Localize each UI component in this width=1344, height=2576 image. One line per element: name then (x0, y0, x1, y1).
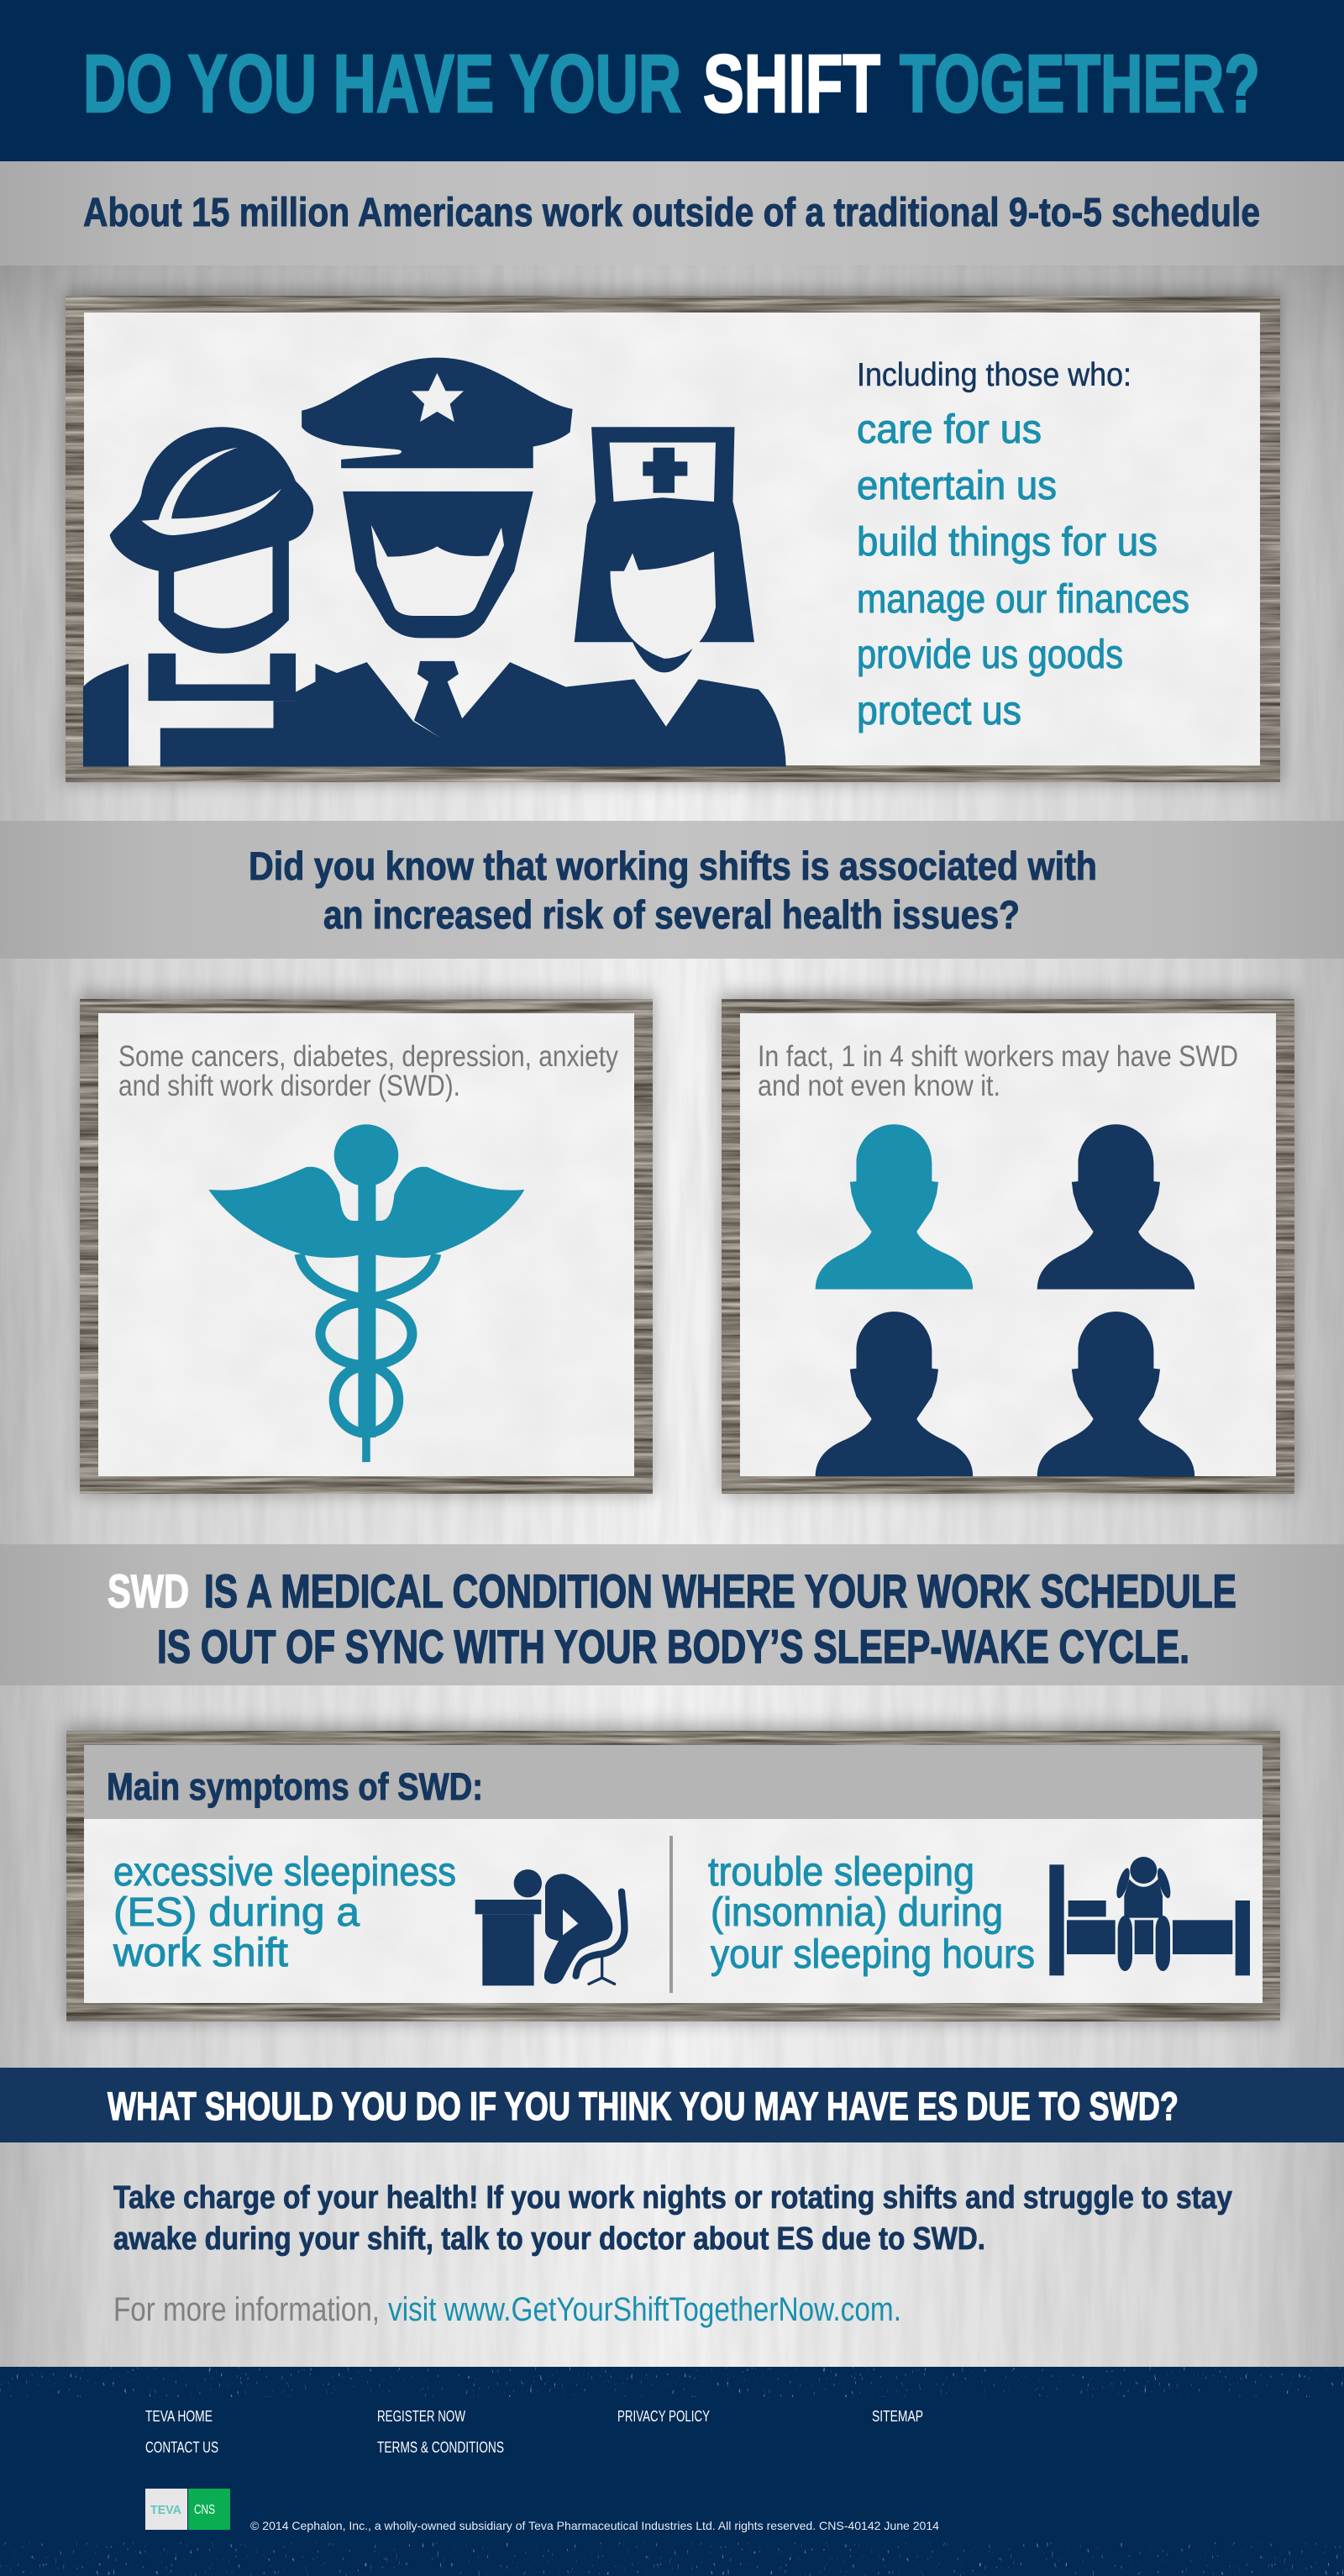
footer links: PRIVACY POLICY (617, 2408, 710, 2425)
text: 1 in 4 (758, 1040, 1238, 1102)
text: excessive sleepiness: excessive sleepiness (113, 1850, 456, 1895)
list: including those who: entertain us (857, 464, 1057, 508)
footer (0, 2367, 1344, 2576)
list: including those who: build things for us (857, 520, 1158, 565)
text: more information link: visit www.GetYourShiftTogetherNow.com. (388, 2291, 901, 2328)
band heading: Did you know that working shifts is associated with (249, 844, 1097, 888)
icon: construction worker (83, 427, 313, 766)
icon: person asleep at desk (475, 1869, 624, 1985)
list: including those who: protect us (857, 689, 1021, 733)
band heading (108, 1564, 1236, 1673)
text: conditions: Some cancers, diabetes, depression, anxiety (118, 1040, 618, 1073)
text: trouble sleeping: trouble sleeping (708, 1850, 974, 1895)
footer links: REGISTER NOW (377, 2408, 465, 2425)
footer links: TEVA HOME (145, 2408, 213, 2425)
panel: 1 in 4 shift workers (722, 994, 1294, 1494)
text: take charge of your health (113, 2180, 1232, 2257)
band: 15 million Americans (0, 161, 1344, 265)
panel: health conditions (80, 994, 653, 1494)
icon: four people, one highlighted (816, 1124, 1194, 1476)
text: conditions: and shift work disorder (SWD). (118, 1070, 460, 1102)
band: health issues question (0, 821, 1344, 959)
text: 1 in 4: In fact, 1 in 4 shift workers may have SWD (758, 1040, 1238, 1073)
text: trouble sleeping: your sleeping hours (711, 1932, 1035, 1977)
text: 1 in 4: and not even know it. (758, 1070, 1000, 1102)
list: including those who (857, 357, 1189, 733)
title (83, 38, 1260, 129)
icon: worker, police officer and nurse (83, 358, 786, 766)
panel: workers (66, 291, 1280, 782)
text: more information link (113, 2291, 901, 2328)
text: trouble sleeping: (insomnia) during (711, 1890, 1003, 1935)
band: SWD definition (0, 1544, 1344, 1685)
band heading (249, 844, 1097, 937)
text: more information link: For more information, (113, 2291, 380, 2328)
header banner (0, 0, 1344, 161)
footer links: SITEMAP (872, 2408, 923, 2425)
list: including those who: manage our finances (857, 577, 1189, 622)
text: excessive sleepiness: (ES) during a (113, 1890, 360, 1935)
list: including those who: Including those who: (857, 357, 1131, 393)
text: trouble sleeping (708, 1850, 1035, 1977)
symptoms heading: Main symptoms of SWD: (107, 1765, 483, 1808)
logo: Teva CNS: TEVA (150, 2503, 181, 2517)
logo: Teva CNS (145, 2489, 230, 2530)
text: conditions (118, 1040, 618, 1102)
title: SHIFT (703, 38, 880, 129)
footer links: CONTACT US (145, 2439, 218, 2456)
copyright: © 2014 Cephalon, Inc., a wholly-owned subsidiary of Teva Pharmaceutical Industries Ltd. All rights reserved. CNS-40142 June 2014 (250, 2519, 939, 2532)
footer links: TERMS & CONDITIONS (377, 2439, 504, 2456)
panel: main symptoms (66, 1726, 1280, 2021)
list: including those who: provide us goods (857, 633, 1123, 677)
band heading: an increased risk of several health issues? (323, 892, 1020, 937)
footer links (145, 2408, 923, 2456)
logo: Teva CNS: CNS (194, 2503, 215, 2517)
band heading: SWD (108, 1564, 189, 1617)
title: DO YOU HAVE YOUR (83, 38, 681, 129)
icon: person awake on bed (1049, 1857, 1250, 1975)
icon: caduceus (208, 1124, 524, 1462)
band: what should you do (0, 2068, 1344, 2142)
text: excessive sleepiness: work shift (113, 1931, 288, 1975)
list: including those who: care for us (857, 407, 1042, 452)
text: take charge of your health: awake during your shift, talk to your doctor about ES due to SWD. (113, 2221, 985, 2257)
icon: nurse (575, 427, 754, 672)
icon: police officer (274, 358, 786, 766)
text: excessive sleepiness (113, 1850, 456, 1975)
